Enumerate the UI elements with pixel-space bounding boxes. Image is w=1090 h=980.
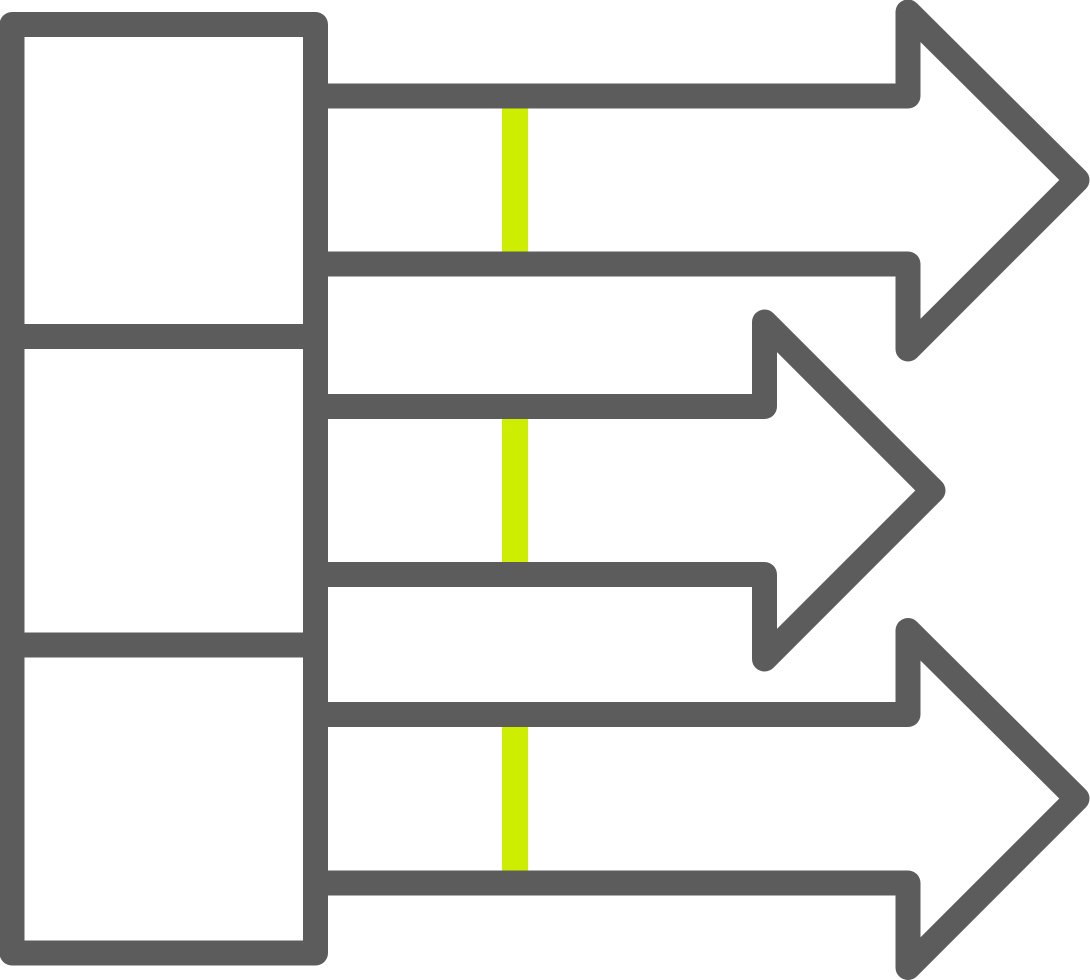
arrow: middle (316, 322, 933, 659)
table column with three cells (12, 24, 316, 953)
arrow: bottom (316, 630, 1077, 968)
accent bar: top arrow (502, 100, 528, 260)
accent bar: bottom arrow (502, 718, 528, 878)
accent bar: middle arrow (502, 410, 528, 570)
arrow: top (316, 12, 1077, 349)
